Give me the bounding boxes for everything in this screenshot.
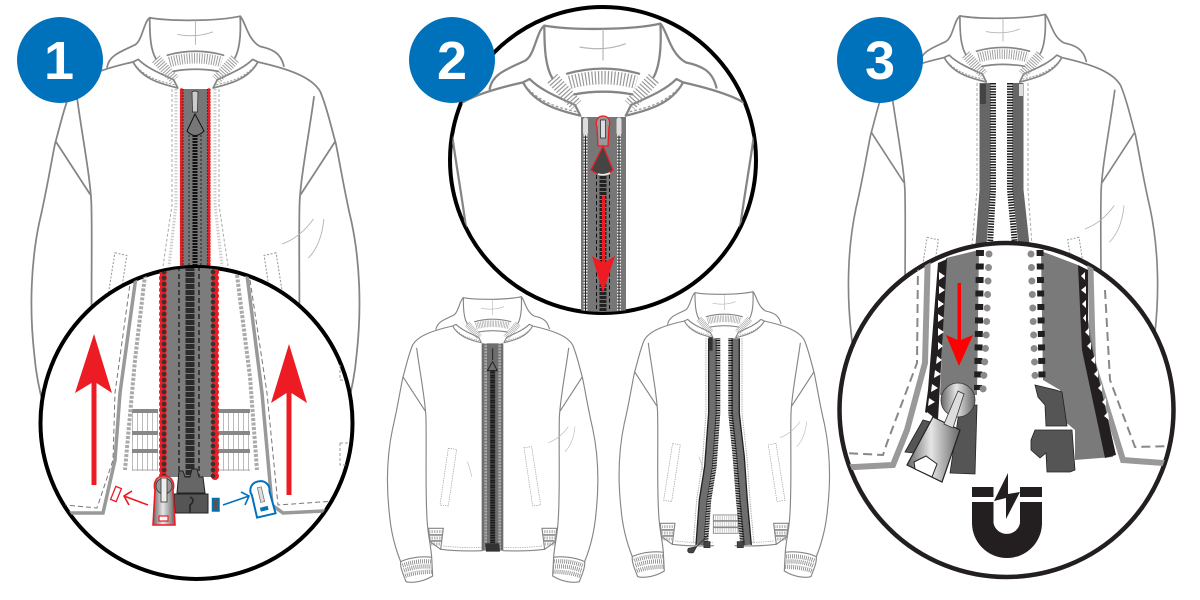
blue slider xyxy=(249,479,276,518)
right tape and teeth xyxy=(1031,250,1116,460)
small open jacket xyxy=(619,292,829,577)
small closed jacket xyxy=(388,297,598,582)
left tape and teeth xyxy=(925,250,989,420)
left red up arrow xyxy=(75,334,112,485)
red down arrow xyxy=(946,283,973,366)
open zipper strips xyxy=(972,83,1032,245)
step badge 2: 2 xyxy=(437,31,467,91)
step badge 3 xyxy=(837,17,923,103)
jacket outline 1 xyxy=(31,16,359,462)
zipper tape and teeth xyxy=(581,117,626,317)
left bottom stop xyxy=(905,405,977,474)
blue insert pin xyxy=(212,498,219,511)
zoom circle 3 xyxy=(830,243,1190,577)
zoom circle 1 xyxy=(40,262,352,579)
jacket outline 3 xyxy=(848,14,1158,434)
zipper closed, highlighted in red xyxy=(163,89,228,267)
right red up arrow xyxy=(271,344,307,495)
step badge 3: 3 xyxy=(865,31,895,91)
blue arrow to slider xyxy=(223,492,249,505)
panel 3: separated zipper and magnetic closure xyxy=(830,14,1190,577)
step badge 1 xyxy=(17,17,103,103)
right bottom stop xyxy=(1031,385,1075,472)
red arrow to pin xyxy=(124,491,148,505)
icon: magnet with lightning bolt xyxy=(972,473,1042,558)
step badge 1: 1 xyxy=(44,31,74,91)
large zipper slider xyxy=(907,383,975,482)
garment edges and stitching xyxy=(65,262,350,513)
red down arrow xyxy=(592,196,615,293)
panel 1: jacket with zipper being aligned xyxy=(17,16,359,579)
waist ribbing xyxy=(132,411,250,470)
garment edges and stitching xyxy=(849,262,1165,470)
jacket neck detail xyxy=(452,18,895,312)
zipper bottom stop xyxy=(174,469,208,513)
step badge 2 xyxy=(409,17,495,103)
zipper tape and teeth xyxy=(160,262,217,478)
red detached insert pin xyxy=(111,486,121,502)
panel 2: closed and open jacket views xyxy=(388,7,829,595)
red slider xyxy=(153,476,175,525)
zipper slider outlined in red xyxy=(591,116,613,175)
zoom circle 2 xyxy=(448,5,758,315)
